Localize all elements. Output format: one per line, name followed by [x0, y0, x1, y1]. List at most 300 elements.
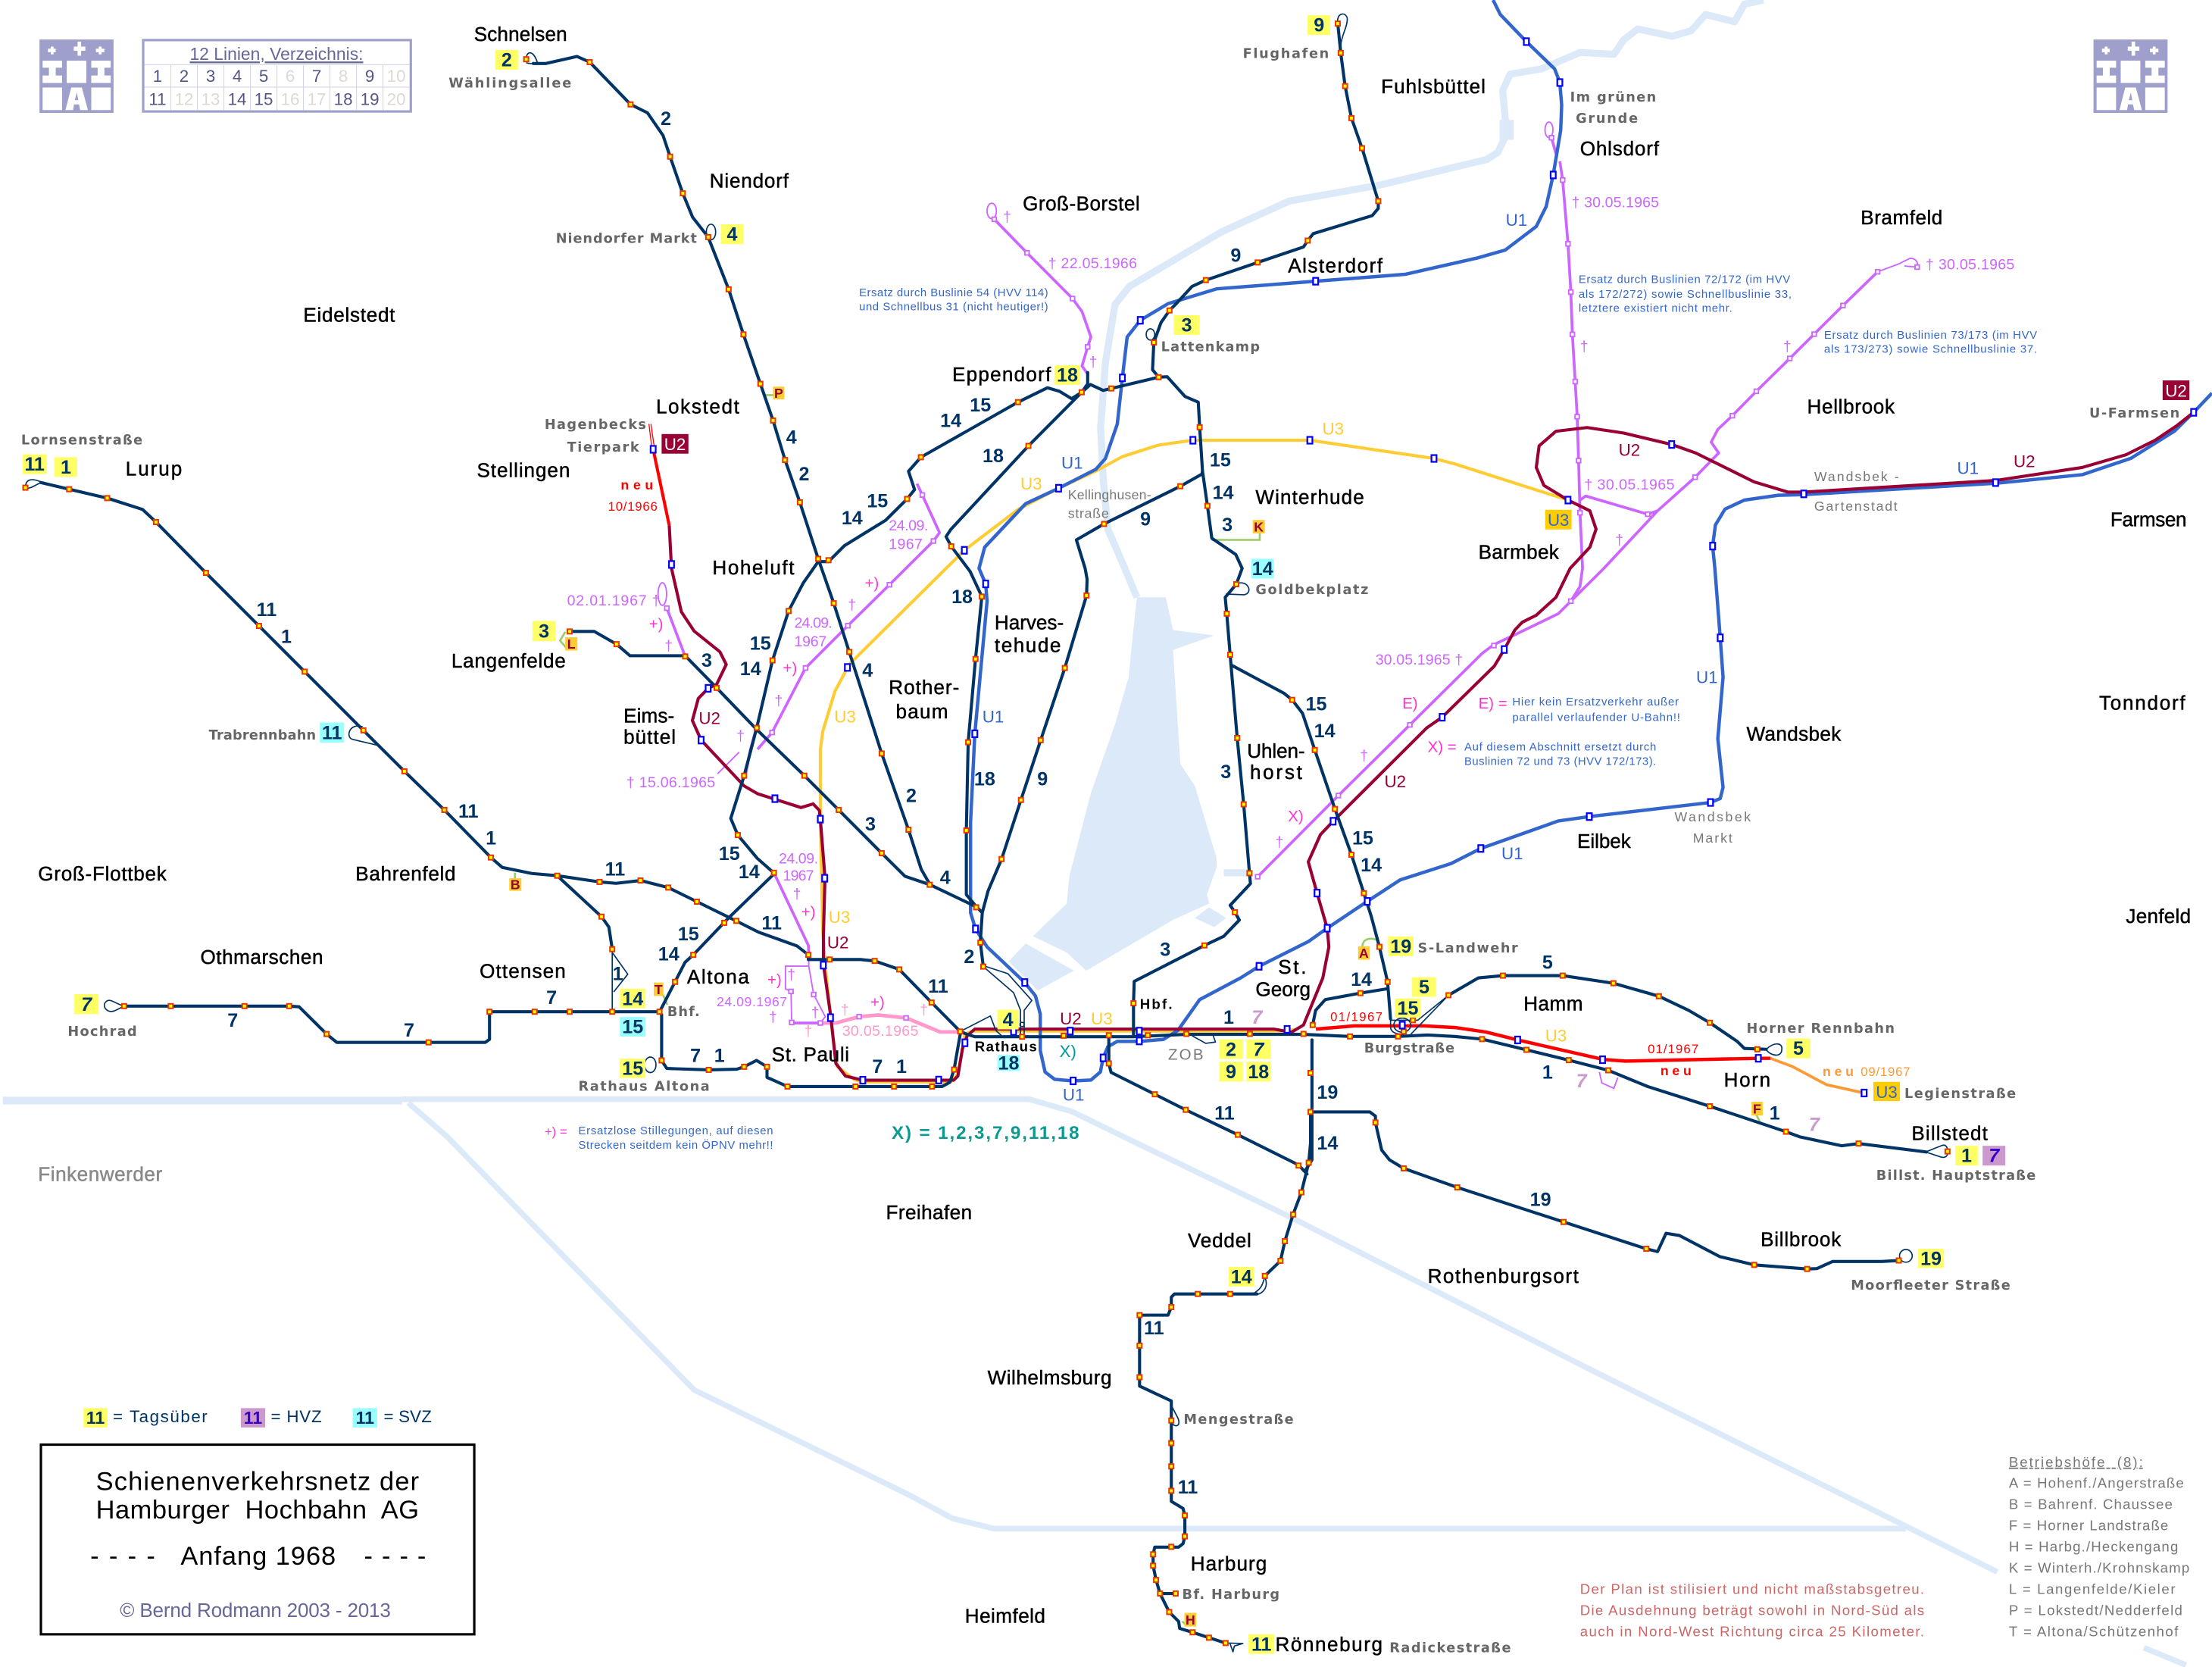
terminus badges yellow: 11 [24, 454, 45, 475]
line number labels on routes: 14 [1351, 969, 1372, 990]
closure dates in magenta: † [769, 1009, 777, 1025]
district names: Uhlen- [1247, 740, 1305, 762]
depot list: T = Altona/Schützenhof [2009, 1623, 2179, 1639]
terminus badges yellow: 19 [1390, 937, 1411, 958]
pink note markers: E) = [1479, 695, 1507, 712]
Eppendorf terminus stub [1082, 373, 1088, 393]
closure dates in magenta: † [774, 693, 783, 709]
note: Bramfeld replacement: Ersatz durch Buslinien 73/173 (im HVV [1824, 330, 2037, 342]
district names: Eidelstedt [303, 304, 395, 327]
closure dates in magenta: 30.05.1965 † [1376, 652, 1463, 668]
station names bold grey: Flughafen [1243, 46, 1329, 61]
closure dates in magenta: † [804, 1023, 812, 1040]
pale peak-hour line 7 labels: 7 [1809, 1115, 1820, 1136]
district names: Groß-Flottbek [38, 862, 167, 885]
station names plain grey: Wandsbek [1674, 809, 1751, 824]
district names: Horn [1724, 1068, 1770, 1091]
line number labels on routes: 1 [1223, 1007, 1234, 1028]
station names bold grey: Niendorfer Markt [556, 231, 697, 246]
district names: St. Pauli [772, 1043, 849, 1065]
water: Alster widening [1503, 120, 1511, 139]
closed stub Eimsbuettel [745, 724, 758, 774]
district names: baum [896, 700, 948, 723]
U1 labels: U1 [983, 707, 1004, 726]
depot spurs in green [515, 395, 1761, 1624]
line number labels on routes: 7 [404, 1020, 414, 1041]
legend: peak hours [241, 1407, 322, 1428]
evening service badges cyan: 18 [998, 1053, 1020, 1074]
line number labels on routes: 14 [740, 658, 761, 680]
tram line 5 [1448, 976, 1767, 1049]
line number labels on routes: 14 [1317, 1133, 1338, 1154]
station names bold grey: Moorfleeter Straße [1851, 1278, 2010, 1293]
active line numbers: 7 [312, 67, 321, 86]
note: Gross-Borstel replacement: und Schnellbus 31 (nicht heutiger!) [859, 302, 1048, 314]
active line numbers: 18 [334, 90, 353, 109]
U3 labels: U3 [834, 707, 856, 726]
terminus badges yellow: 4 [727, 224, 738, 246]
active line numbers: 4 [233, 67, 242, 86]
inactive line numbers: 16 [281, 90, 299, 109]
pink note markers: X) [1288, 808, 1304, 825]
district names: Eppendorf [952, 363, 1051, 386]
U2 labels [698, 441, 2035, 1028]
district names: Finkenwerder [38, 1163, 162, 1186]
closure dates in magenta: † [841, 1002, 849, 1018]
district names: Ottensen [480, 960, 566, 983]
inactive line numbers: 8 [339, 67, 348, 86]
U3 labels [829, 420, 1567, 1045]
line number labels on routes: 11 [458, 801, 479, 822]
tram line 9 south [983, 471, 1202, 912]
line number labels on routes: 1 [486, 828, 496, 849]
closure dates in magenta: 30.05.1965 [842, 1023, 918, 1040]
district names: Altona [687, 965, 749, 988]
closed branch Barmbek [1580, 496, 1657, 514]
closure dates in magenta: † [1089, 354, 1098, 371]
district names: Farmsen [2110, 508, 2186, 531]
pink note markers: +) [783, 659, 797, 677]
station names bold grey: Tierpark [567, 440, 640, 455]
station names bold grey: Horner Rennbahn [1746, 1021, 1895, 1037]
line number labels on routes: 14 [1314, 721, 1336, 742]
pink note markers: +) [649, 616, 663, 633]
tram line 18 [946, 393, 1082, 907]
line number labels on routes: 11 [1144, 1318, 1164, 1339]
U1 labels [983, 211, 1979, 1105]
station names bold grey: S-Landwehr [1418, 941, 1518, 956]
district names: Rönneburg [1275, 1633, 1382, 1656]
line number labels on routes: 5 [1542, 952, 1553, 973]
district names: Langenfelde [451, 649, 566, 672]
station names plain grey: Markt [1693, 830, 1732, 846]
pink note markers: +) [801, 903, 816, 921]
active line numbers: 19 [361, 90, 380, 109]
subtitle with date [90, 1542, 426, 1571]
line number labels on routes: 2 [661, 108, 671, 130]
line number labels on routes: 18 [974, 768, 995, 790]
station names bold grey: Hagenbecks [545, 418, 646, 433]
new construction notes: neu [1661, 1063, 1692, 1078]
note: E) explanation [1512, 696, 1680, 724]
inactive line numbers: 20 [387, 90, 406, 109]
logo: Hochbahn emblem right [2094, 39, 2167, 113]
district names: Wilhelmsburg [988, 1366, 1111, 1389]
line number labels on routes: 1 [613, 963, 623, 984]
tram line 1 thin section [612, 949, 628, 1012]
terminus badges yellow: 15 [1398, 998, 1419, 1019]
U2 labels: U2 [2014, 452, 2035, 471]
closed line Bramfeld [1258, 272, 1878, 877]
pink note markers: +) = [545, 1124, 567, 1139]
station names bold grey: Grunde [1576, 111, 1638, 127]
closure dates in magenta: † 30.05.1965 [1584, 477, 1675, 493]
terminus badges yellow: 1 [61, 457, 71, 478]
note: E) explanation: Hier kein Ersatzverkehr außer [1512, 696, 1679, 708]
line number labels on routes: 9 [1230, 245, 1241, 266]
peak hour badge purple [1982, 1146, 2005, 1167]
line number labels on routes: 11 [605, 859, 625, 880]
note: +) explanation: Ersatzlose Stillegungen, auf diesen [579, 1125, 773, 1137]
line number labels on routes: 3 [701, 650, 712, 671]
station names bold grey: Bhf. [667, 1005, 700, 1020]
inactive line numbers: 17 [308, 90, 326, 109]
new construction notes: neu [1823, 1064, 1854, 1079]
line number labels on routes: 9 [1140, 509, 1151, 530]
closed line stops [664, 136, 1920, 1025]
station names bold grey: U-Farmsen [2089, 406, 2179, 421]
district names: Billbrook [1761, 1228, 1842, 1250]
depot markers: P [774, 386, 783, 401]
closed line Langenfelde spur [667, 608, 685, 656]
U3 labels: U3 [1545, 1026, 1567, 1045]
subtitle with date: - - - - [364, 1542, 426, 1571]
note: Gross-Borstel replacement: Ersatz durch Buslinie 54 (HVV 114) [859, 287, 1048, 299]
X) line list: X) = 1,2,3,7,9,11,18 [892, 1123, 1079, 1143]
note: Ohlsdorf replacement: Ersatz durch Buslinien 72/172 (im HVV [1579, 274, 1790, 286]
district names: Rothenburgsort [1428, 1265, 1579, 1287]
station names bold grey: Billst. Hauptstraße [1876, 1168, 2035, 1184]
station names bold black: Rathaus [975, 1038, 1037, 1054]
depot markers [509, 386, 1763, 1628]
district names: Hoheluft [712, 556, 795, 579]
active line numbers: 15 [255, 90, 273, 109]
subtitle with date: - - - - [90, 1542, 155, 1571]
U3 St. Georg wedge [1274, 1028, 1301, 1034]
new U-Bahn section U3 in red [1316, 1026, 1770, 1061]
line number labels on routes: 18 [951, 586, 973, 608]
water: Elbe harbour arm [402, 1099, 1998, 1572]
closure dates in magenta: 24.09.1967 [717, 994, 787, 1009]
note: +) explanation [579, 1125, 773, 1152]
closed lines in magenta [658, 122, 1920, 1088]
copyright: © Bernd Rodmann 2003 - 2013 [120, 1599, 391, 1622]
new construction notes: 10/1966 [608, 499, 658, 514]
line number labels on routes: 3 [1222, 514, 1233, 536]
active line numbers: 5 [259, 67, 268, 86]
line number labels on routes: 14 [739, 862, 760, 883]
pale peak-hour line 7 labels: 7 [1576, 1071, 1588, 1092]
water: Elbe corner fragment [2144, 1648, 2186, 1665]
station names bold grey: Im grünen [1570, 90, 1656, 105]
station names bold grey: Trabrennbahn [209, 728, 316, 743]
station names plain grey: Wandsbek - [1814, 469, 1899, 484]
U2 labels: U2 [698, 708, 720, 727]
line number labels on routes: 14 [658, 943, 680, 965]
closure dates in magenta: † [787, 966, 795, 983]
closure dates in magenta: † [811, 1005, 820, 1021]
district names: Hellbrook [1807, 396, 1895, 418]
inactive line numbers: 13 [202, 90, 220, 109]
note: E) explanation: parallel verlaufender U-Bahn!! [1512, 712, 1680, 724]
station names bold grey: Goldbekplatz [1255, 583, 1368, 598]
legend: peak hours: = HVZ [271, 1407, 322, 1426]
legend: off-peak [353, 1407, 432, 1428]
pink note markers [545, 575, 1507, 1139]
note: Bramfeld replacement [1824, 330, 2037, 356]
station names plain grey: Gartenstadt [1814, 499, 1898, 514]
depot list: P = Lokstedt/Nedderfeld [2009, 1602, 2182, 1618]
line number labels on routes: 11 [1214, 1103, 1235, 1124]
district names: Rother- [889, 676, 959, 699]
depot markers: B [511, 877, 520, 893]
tram line 7 [124, 1006, 961, 1087]
U-Bahn stations [651, 38, 2196, 1096]
terminus badges yellow: 4 [1003, 1009, 1014, 1031]
closure dates in magenta: † 30.05.1965 [1572, 195, 1659, 211]
terminus badges yellow: 18 [1057, 365, 1078, 386]
closed loops [658, 122, 1917, 1088]
closure dates in magenta [567, 195, 2014, 1040]
scale disclaimer note: Die Ausdehnung beträgt sowohl in Nord-Süd als [1580, 1602, 1924, 1618]
district names: Niendorf [710, 170, 789, 192]
closed line Gross-Borstel [995, 219, 1091, 375]
scale disclaimer note [1580, 1581, 1924, 1639]
note: Gross-Borstel replacement [859, 287, 1048, 314]
district names: Bramfeld [1861, 206, 1942, 229]
terminus badges yellow: 14 [622, 988, 643, 1009]
line number labels on routes: 3 [865, 814, 876, 835]
terminus badges yellow: 5 [1793, 1038, 1804, 1059]
terminus badges yellow: 9 [1226, 1062, 1236, 1083]
line number labels on routes: 1 [1770, 1103, 1780, 1124]
U1 labels: U1 [1957, 459, 1979, 478]
line number labels on routes: 15 [1352, 828, 1373, 849]
line number labels on routes: 15 [719, 843, 740, 865]
station names bold black: Hbf. [1140, 996, 1173, 1012]
closure dates in magenta: † [1783, 339, 1792, 355]
depot markers: K [1254, 520, 1264, 535]
line number labels on routes: 15 [867, 490, 888, 511]
closure dates in magenta: † [1580, 339, 1589, 355]
closure dates in magenta: † 22.05.1966 [1048, 255, 1137, 272]
terminus badges yellow: 3 [1182, 315, 1192, 336]
pink note markers: +) [767, 971, 782, 989]
terminus badges yellow: 11 [1251, 1634, 1272, 1655]
U-Bahn terminus badges [661, 380, 2189, 1102]
U-Bahn line labels [698, 211, 2035, 1105]
inactive line numbers [175, 67, 406, 109]
closure dates in magenta: † 15.06.1965 [626, 774, 715, 791]
closed line Ohlsdorf [1551, 138, 1582, 601]
blue notes on replacement services [579, 274, 2037, 1152]
district names: Ohlsdorf [1580, 137, 1660, 160]
U2 labels: U2 [827, 933, 848, 952]
new construction notes [608, 477, 1910, 1079]
closure dates in magenta: † [793, 886, 801, 902]
station names bold grey: Hochrad [67, 1024, 137, 1040]
line number labels on routes: 7 [227, 1010, 238, 1031]
note: X) explanation: Auf diesem Abschnitt ersetzt durch [1464, 742, 1656, 754]
U-Bahn terminus badges: U2 [664, 435, 686, 454]
pale peak-hour line 7 labels: 7 [1251, 1007, 1263, 1028]
terminus badges yellow: 7 [81, 994, 92, 1015]
line index table [143, 40, 411, 111]
district names: Georg [1255, 978, 1311, 1001]
note: Ohlsdorf replacement: letztere existiert nicht mehr. [1579, 303, 1732, 315]
district names: Harburg [1191, 1553, 1267, 1575]
legend: off-peak: 11 [355, 1408, 374, 1428]
district names: Veddel [1188, 1229, 1251, 1252]
U2 labels: U2 [1060, 1009, 1082, 1028]
line number labels on routes: 14 [1361, 855, 1382, 876]
new U-Bahn section U2 Hagenbeck [649, 424, 669, 525]
line number labels on routes: 15 [970, 395, 991, 416]
note: Ohlsdorf replacement [1579, 274, 1792, 315]
station names bold grey: Rathaus Altona [579, 1080, 710, 1095]
line number labels on routes: 1 [896, 1056, 907, 1077]
district names: Schnelsen [474, 23, 567, 45]
district names: Billstedt [1911, 1122, 1989, 1145]
district names: Alsterdorf [1288, 254, 1383, 277]
legend: daytime: = Tagsüber [113, 1407, 208, 1426]
water: Elbe south arm [408, 1103, 1906, 1528]
line number labels on routes: 14 [842, 508, 863, 529]
closure dates in magenta: † [1615, 532, 1623, 549]
station names bold grey: Lattenkamp [1161, 340, 1260, 355]
water: Binnenalster [1009, 943, 1074, 990]
scale disclaimer note: auch in Nord-West Richtung circa 25 Kilometer. [1580, 1623, 1924, 1639]
note: Ohlsdorf replacement: als 172/272) sowie Schnellbuslinie 33, [1579, 289, 1792, 301]
scale disclaimer note: Der Plan ist stilisiert und nicht maßstabsgetreu. [1580, 1581, 1924, 1597]
closed pink line St. Pauli [820, 1015, 961, 1032]
station names plain grey: straße [1068, 505, 1109, 521]
U-Bahn line U1 [970, 0, 2212, 1081]
U3 labels: U3 [829, 908, 850, 927]
U2 labels: U2 [1619, 441, 1640, 460]
closure dates in magenta: 1967 [794, 633, 826, 650]
pink note markers: X) = [1428, 739, 1457, 756]
U1 labels: U1 [1061, 453, 1083, 472]
pink note markers: E) [1402, 695, 1418, 712]
line number labels on routes: 3 [1220, 762, 1231, 783]
line number labels on routes: 4 [940, 868, 951, 889]
tram line 11 south [1109, 1035, 1307, 1174]
evening service badges cyan [320, 558, 1274, 1074]
district names: Hamm [1523, 992, 1582, 1015]
water: upper Alster river [1101, 0, 1764, 597]
title [96, 1468, 419, 1525]
U1 labels: U1 [1506, 211, 1527, 230]
depot legend [2009, 1454, 2189, 1639]
closure dates in magenta: † [1275, 834, 1283, 850]
station names bold black [975, 996, 1173, 1054]
closure dates in magenta: 24.09. [794, 615, 833, 632]
line number labels on routes: 11 [928, 976, 948, 997]
district names: Othmarschen [200, 946, 323, 968]
U3 labels: U3 [1091, 1009, 1113, 1028]
line number labels on routes: 14 [1213, 482, 1234, 503]
line number labels on routes: 1 [1542, 1062, 1553, 1084]
depot list: H = Harbg./Heckengang [2009, 1539, 2178, 1555]
depot markers: H [1186, 1612, 1195, 1628]
station names bold grey: Wählingsallee [448, 76, 571, 91]
closure dates in magenta: † [848, 596, 856, 613]
U1 labels: U1 [1063, 1086, 1084, 1105]
line number labels on routes: 15 [678, 924, 699, 945]
line number labels on routes: 2 [906, 786, 917, 807]
terminus badges yellow: 7 [1253, 1039, 1264, 1060]
district names: Barmbek [1479, 540, 1560, 563]
line number labels on routes: 7 [872, 1056, 883, 1077]
closure dates in magenta: 1967 [783, 868, 814, 884]
line number labels on routes [227, 108, 1820, 1498]
U-Bahn terminus badges: U3 [1548, 511, 1569, 530]
inactive line numbers: 12 [175, 90, 193, 109]
U-Bahn line U2 [669, 412, 2194, 1081]
line number labels on routes: 2 [964, 946, 974, 968]
line number labels on routes: 15 [750, 633, 771, 655]
U-Bahn terminus badges: U3 [1876, 1083, 1898, 1102]
closed loop network St. Pauli [786, 959, 825, 1023]
depot list: L = Langenfelde/Kieler [2009, 1581, 2176, 1597]
district names: tehude [995, 633, 1061, 656]
terminus badges yellow: 15 [622, 1059, 643, 1080]
district names: Groß-Borstel [1023, 192, 1140, 214]
station names plain grey: ZOB [1168, 1046, 1203, 1064]
line number labels on routes: 1 [714, 1045, 725, 1066]
active line numbers [148, 67, 380, 109]
line number labels on routes: 19 [1530, 1189, 1551, 1210]
depot markers: L [567, 636, 576, 652]
tram line 3 west [570, 631, 930, 885]
depot markers: F [1753, 1101, 1761, 1116]
depot markers: A [1359, 946, 1369, 961]
evening service badges cyan: 14 [1252, 558, 1273, 580]
district names: Eims- [623, 704, 674, 727]
depot legend heading: Betriebshöfe (8): [2009, 1454, 2143, 1470]
note: Bramfeld replacement: als 173/273) sowie Schnellbuslinie 37. [1824, 344, 2037, 356]
station names bold grey: Burgstraße [1364, 1041, 1454, 1056]
legend: daytime: 11 [86, 1408, 105, 1428]
new construction notes: neu [620, 477, 653, 493]
tram line 19 [1305, 1040, 1899, 1269]
line number labels on routes: 19 [1317, 1082, 1338, 1103]
district names: horst [1250, 761, 1303, 783]
depot list: B = Bahrenf. Chaussee [2009, 1497, 2173, 1512]
district names: Winterhude [1255, 486, 1364, 508]
terminus badges yellow: 18 [1248, 1062, 1269, 1083]
tram line 14 and 15 Uhlenhorst [1232, 665, 1391, 1019]
closure dates in magenta: † [920, 1002, 928, 1018]
terminus badges yellow: 19 [1920, 1248, 1942, 1269]
water: Aussenalster lake [1033, 597, 1217, 971]
inactive line numbers: 10 [387, 67, 406, 86]
line number labels on routes: 15 [1305, 694, 1326, 715]
station names bold grey: Bf. Harburg [1183, 1587, 1279, 1603]
district names: Stellingen [476, 458, 570, 481]
U-Bahn line U3 [820, 440, 1568, 1082]
